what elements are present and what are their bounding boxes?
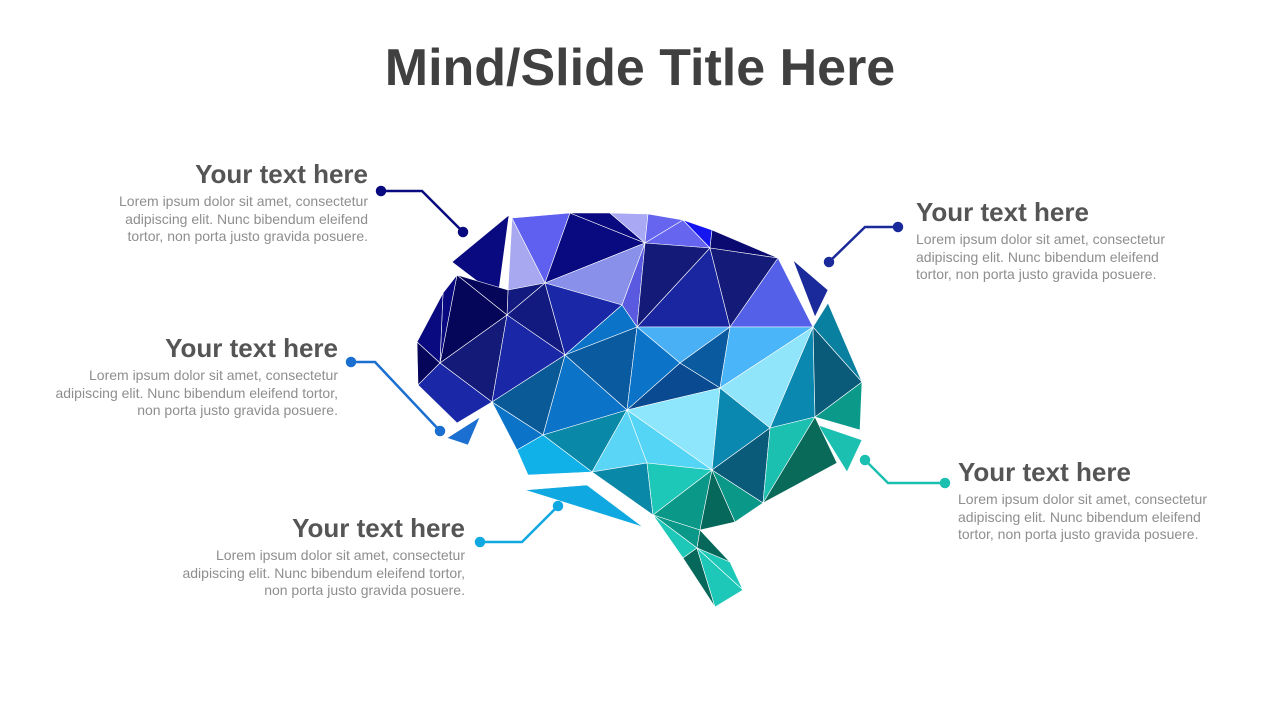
text block: top right: Your text here [916, 197, 1089, 227]
text block: bottom left [182, 513, 465, 598]
text block: bottom left: non porta justo gravida posuere. [264, 582, 465, 598]
text block: top right: tortor, non porta justo gravida posuere. [916, 266, 1156, 282]
text block: middle left [55, 333, 338, 418]
brain [417, 213, 862, 607]
text block: bottom right: adipiscing elit. Nunc bibendum eleifend [958, 509, 1201, 525]
text block: middle left: adipiscing elit. Nunc bibendum eleifend tortor, [55, 385, 338, 401]
text block: bottom right: tortor, non porta justo gravida posuere. [958, 526, 1198, 542]
text block: top right [916, 197, 1165, 282]
connector: middle left [347, 358, 444, 435]
title: Mind/Slide Title Here [385, 39, 895, 97]
text block: top left: Lorem ipsum dolor sit amet, consectetur [119, 193, 368, 209]
connector: top left [377, 187, 467, 236]
text block: bottom right [958, 457, 1207, 542]
text block: top left: Your text here [195, 159, 368, 189]
text block: middle left: Your text here [165, 333, 338, 363]
text block: top right: Lorem ipsum dolor sit amet, consectetur [916, 231, 1165, 247]
connector: bottom right [861, 456, 949, 487]
text block: bottom left: Your text here [292, 513, 465, 543]
text block: middle left: Lorem ipsum dolor sit amet, consectetur [89, 367, 338, 383]
text block: bottom right: Your text here [958, 457, 1131, 487]
text block: top left [119, 159, 368, 244]
text block: top left: adipiscing elit. Nunc bibendum eleifend [125, 211, 368, 227]
text block: middle left: non porta justo gravida posuere. [137, 402, 338, 418]
text block: bottom right: Lorem ipsum dolor sit amet, consectetur [958, 491, 1207, 507]
text block: top left: tortor, non porta justo gravida posuere. [128, 228, 368, 244]
text block: bottom left: adipiscing elit. Nunc bibendum eleifend tortor, [182, 565, 465, 581]
connector: top right [825, 223, 902, 266]
text block: bottom left: Lorem ipsum dolor sit amet, consectetur [216, 547, 465, 563]
text block: top right: adipiscing elit. Nunc bibendum eleifend [916, 249, 1159, 265]
connector: bottom left [476, 502, 562, 546]
